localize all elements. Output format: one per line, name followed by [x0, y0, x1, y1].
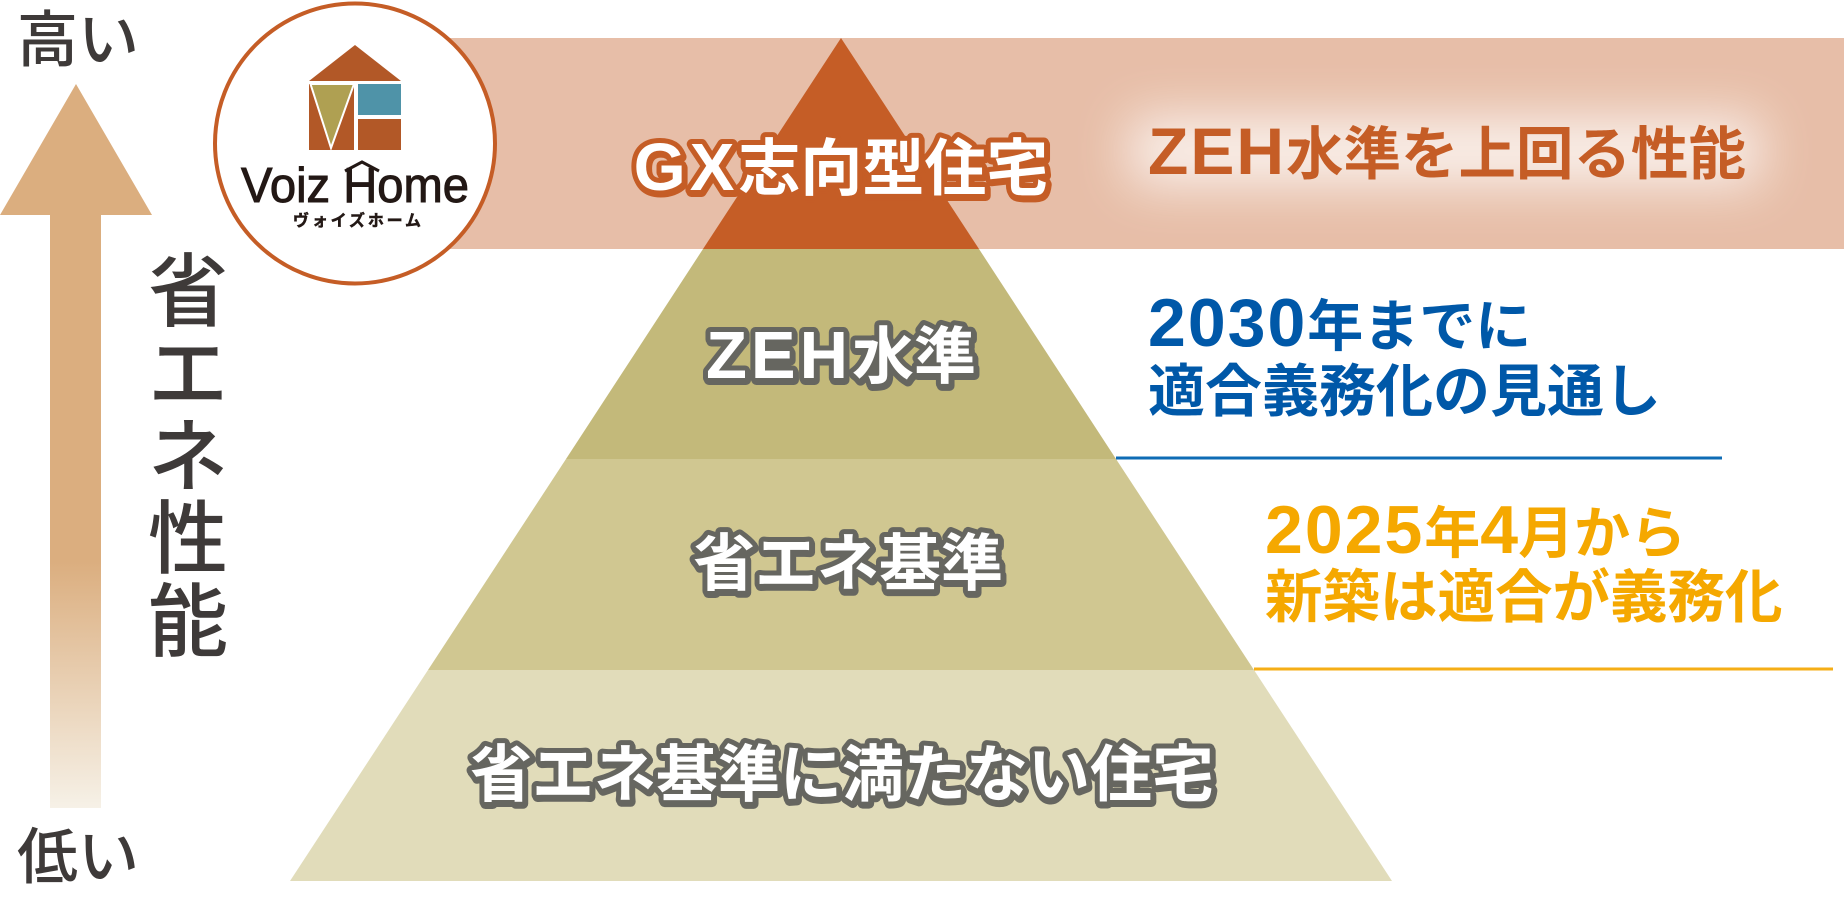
note: 2030: 2030年までに — [1148, 285, 1531, 361]
tier: below standard — [290, 670, 1392, 881]
pyramid — [290, 38, 1392, 881]
axis title: energy performance — [148, 248, 228, 667]
tier label: standard: 省エネ基準 — [693, 530, 1003, 599]
divider: orange — [1254, 668, 1833, 670]
logo katakana: ヴォイズホーム — [293, 211, 421, 230]
tier label: GX: GX志向型住宅 — [634, 130, 1048, 205]
note: 2025: 2025年4月から — [1265, 492, 1686, 568]
note: 2030 — [1148, 285, 1661, 424]
note: 2030: 適合義務化の見通し — [1148, 360, 1661, 424]
icon: small roof over H — [345, 162, 379, 171]
label: low: 低い — [17, 823, 139, 891]
axis title: energy performance: エ — [148, 330, 228, 419]
tier: ZEH — [566, 249, 1116, 459]
note: 2025 — [1265, 492, 1782, 630]
axis title: energy performance: 能 — [148, 578, 228, 667]
label: high: 高い — [17, 6, 139, 74]
performance arrow — [0, 84, 152, 808]
badge circle — [215, 4, 495, 284]
top highlight band — [400, 38, 1844, 249]
axis title: energy performance: ネ — [148, 413, 228, 502]
logo wordmark: Voiz Home — [241, 159, 469, 213]
axis title: energy performance: 性 — [148, 495, 228, 584]
tier label: below standard: 省エネ基準に満たない住宅 — [470, 741, 1214, 810]
glow behind note — [1130, 118, 1760, 184]
divider: blue — [1116, 456, 1722, 460]
tier: standard — [428, 459, 1254, 670]
axis title: energy performance: 省 — [148, 248, 228, 337]
logo badge — [215, 4, 495, 284]
tier: GX — [703, 38, 979, 249]
tier label: ZEH: ZEH水準 — [706, 318, 976, 393]
note: above ZEH: ZEH水準を上回る性能 — [1148, 114, 1746, 188]
note: 2025: 新築は適合が義務化 — [1265, 566, 1782, 630]
icon: house — [309, 45, 401, 150]
